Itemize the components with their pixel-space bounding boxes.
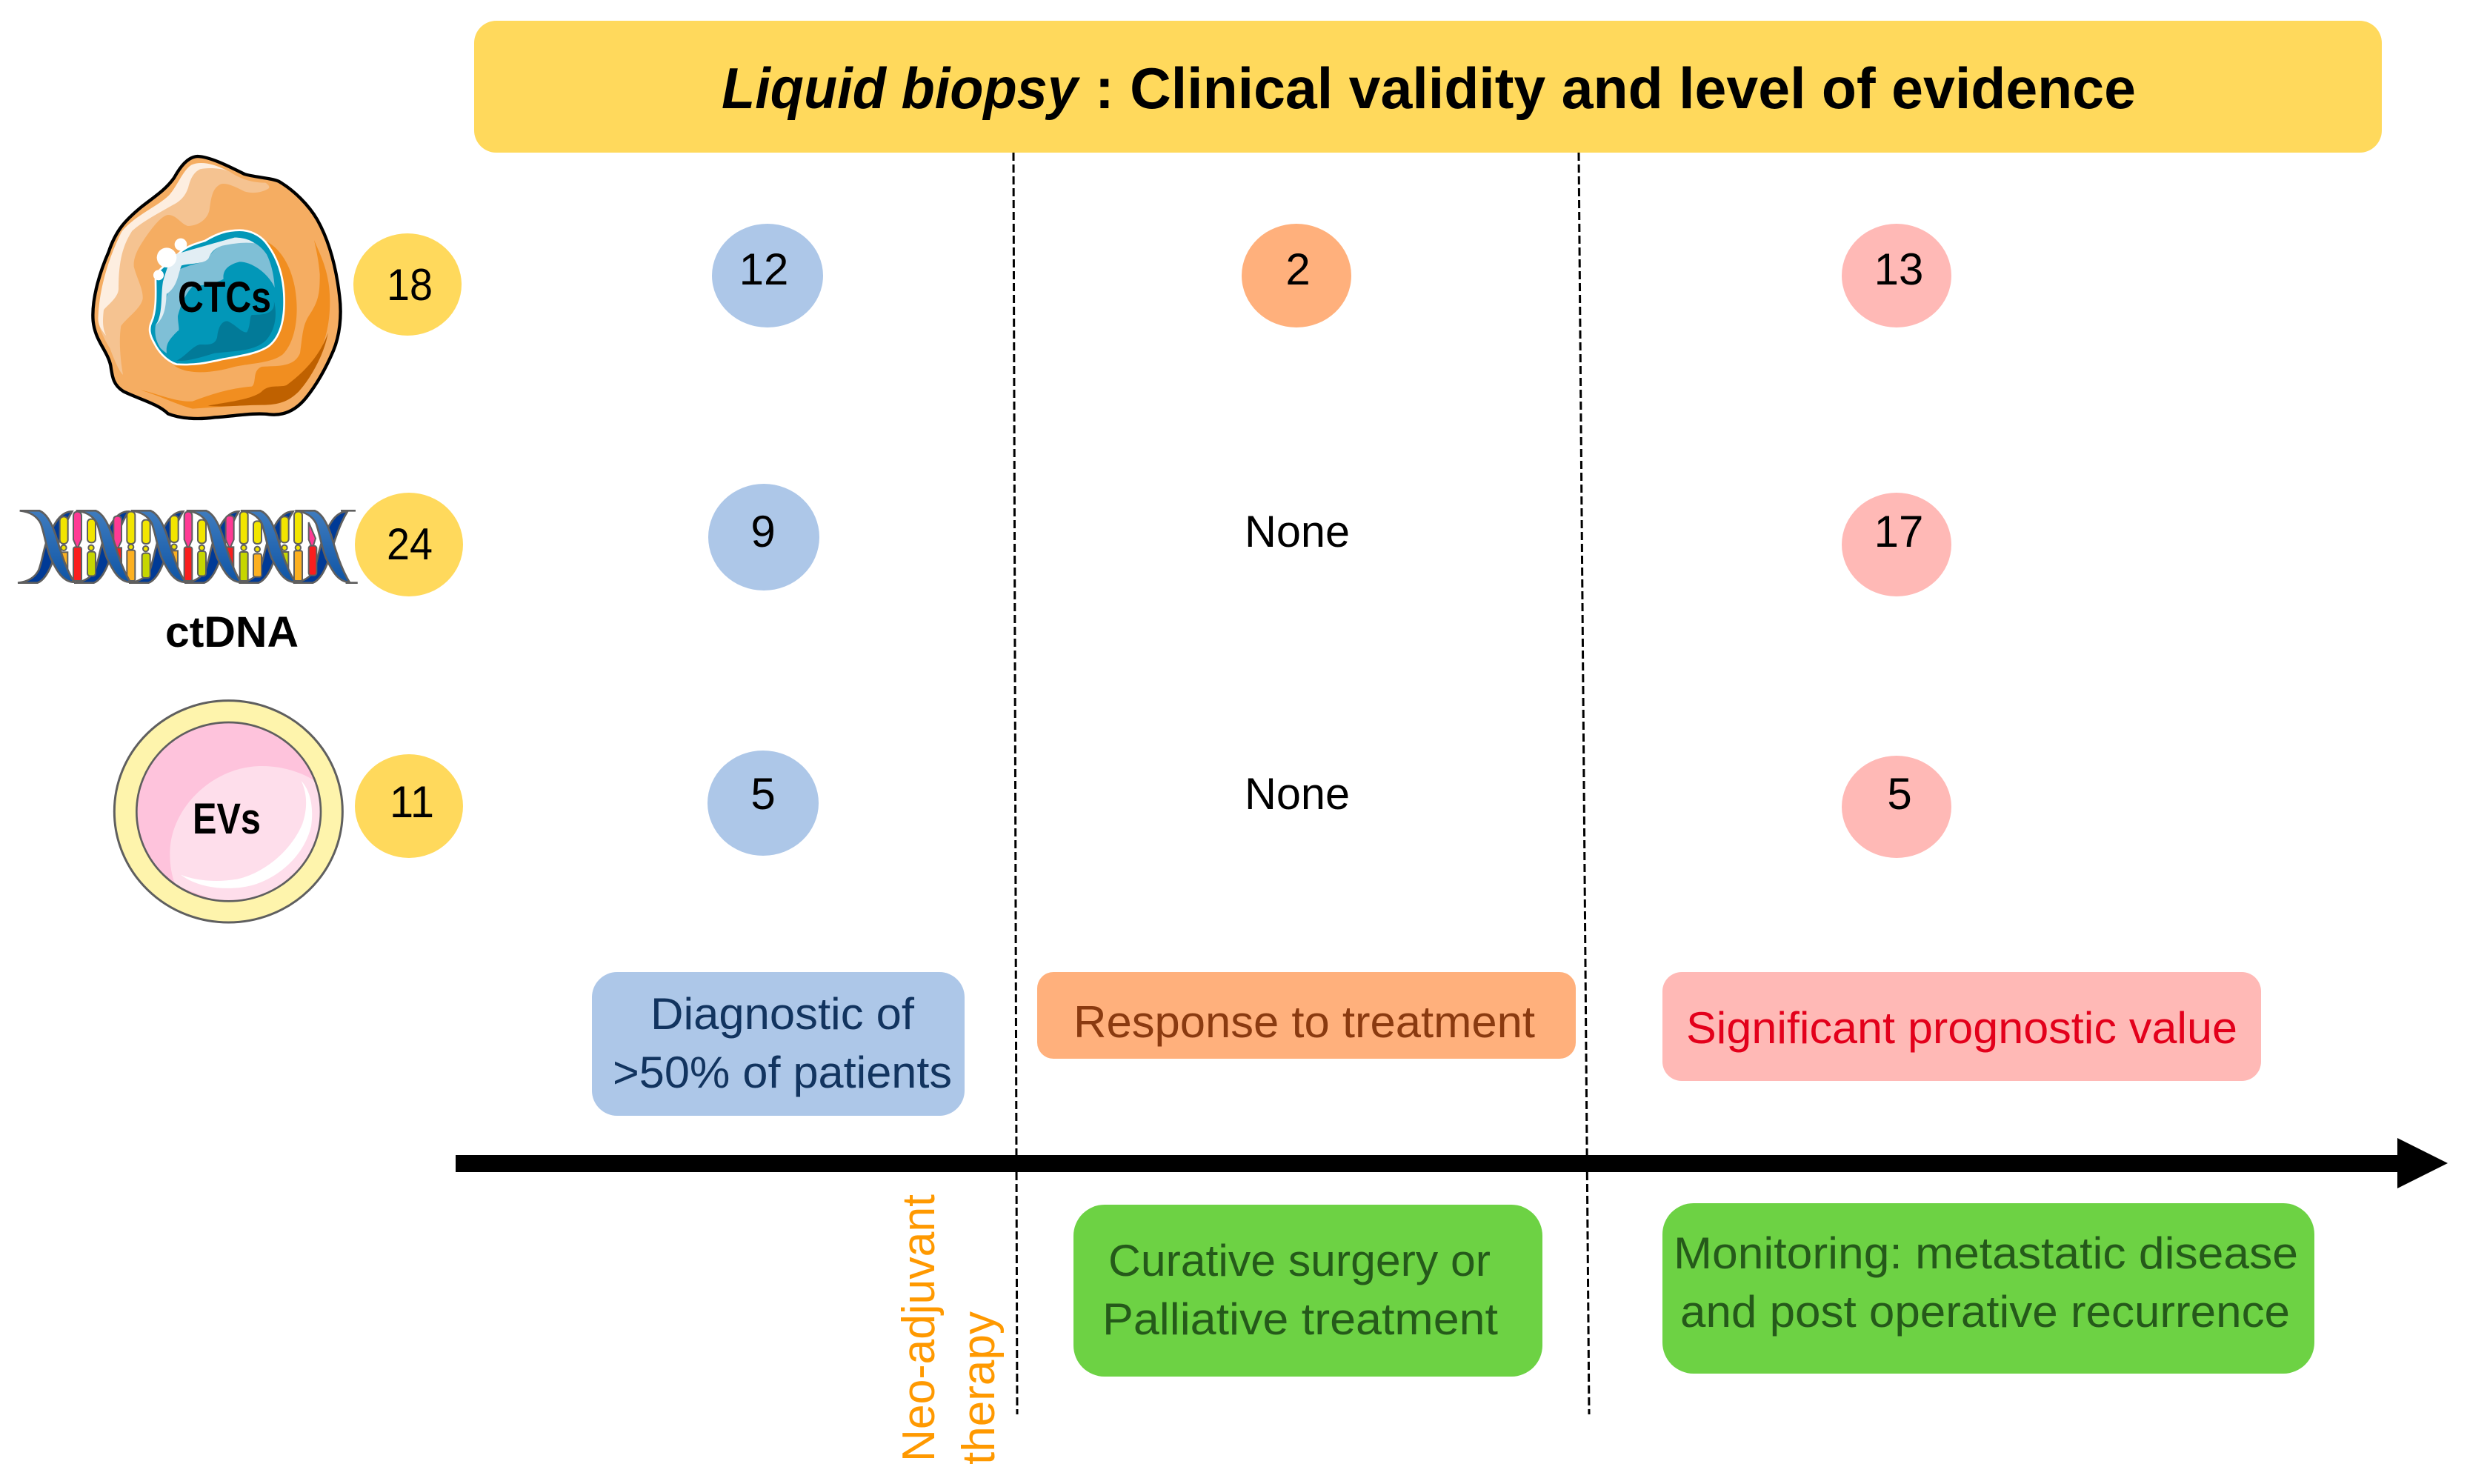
yellow count: ctDNA 24 (355, 493, 463, 596)
orange count: CTCs 2: 2 (1285, 244, 1311, 294)
text: None EVs: None (1245, 769, 1350, 819)
yellow count: EVs 11: 11 (390, 777, 434, 827)
title banner: : Clinical validity and level of evidence (1095, 56, 2136, 121)
blue count: CTCs 12 (712, 224, 823, 327)
pink count: ctDNA 17: 17 (1874, 507, 1923, 556)
box: diagnostic: Diagnostic of (650, 989, 914, 1039)
icon: extracellular vesicle (114, 701, 342, 922)
label: neo-adjuvant therapy: therapy (953, 1311, 1005, 1465)
blue count: CTCs 12: 12 (739, 244, 788, 294)
label: EVs: EVs (193, 795, 261, 843)
label: neo-adjuvant therapy: Neo-adjuvant (893, 1194, 945, 1462)
box: diagnostic (592, 972, 965, 1116)
blue count: EVs 5: 5 (750, 769, 776, 819)
box: significant prognostic value (1662, 972, 2261, 1081)
pink count: CTCs 13 (1842, 224, 1951, 327)
label: neo-adjuvant therapy (893, 1194, 1005, 1465)
pink count: CTCs 13: 13 (1874, 244, 1923, 294)
yellow count: CTCs 18 (353, 233, 462, 336)
pink count: EVs 5 (1842, 756, 1951, 858)
blue count: ctDNA 9 (708, 484, 819, 590)
icon: DNA helix (18, 510, 358, 583)
box: curative surgery or palliative treatment (1073, 1205, 1542, 1377)
box: response to treatment (1037, 972, 1576, 1059)
box: curative surgery or palliative treatment: Curative surgery or (1108, 1236, 1491, 1285)
box: monitoring: Monitoring: metastatic disease (1674, 1228, 2298, 1278)
box: monitoring (1662, 1203, 2314, 1374)
box: monitoring: and post operative recurrence (1680, 1287, 2290, 1337)
title banner: Liquid biopsy (722, 56, 1080, 121)
yellow count: ctDNA 24: 24 (387, 519, 433, 569)
yellow count: EVs 11 (355, 754, 463, 858)
text: None ctDNA: None (1245, 507, 1350, 556)
title banner (474, 21, 2382, 153)
icon: CTC cell (93, 156, 341, 419)
blue count: ctDNA 9: 9 (750, 507, 776, 556)
box: curative surgery or palliative treatment: Palliative treatment (1102, 1294, 1498, 1344)
blue count: EVs 5 (708, 751, 819, 856)
orange count: CTCs 2 (1242, 224, 1351, 327)
box: response to treatment: Response to treatment (1073, 997, 1535, 1047)
box: diagnostic: >50% of patients (613, 1048, 952, 1097)
label: ctDNA: ctDNA (165, 608, 299, 656)
pink count: EVs 5: 5 (1887, 769, 1912, 819)
box: significant prognostic value: Significant prognostic value (1686, 1003, 2237, 1053)
timeline arrow (456, 1138, 2448, 1188)
yellow count: CTCs 18: 18 (387, 260, 433, 310)
pink count: ctDNA 17 (1842, 493, 1951, 596)
label: CTCs: CTCs (178, 273, 271, 322)
